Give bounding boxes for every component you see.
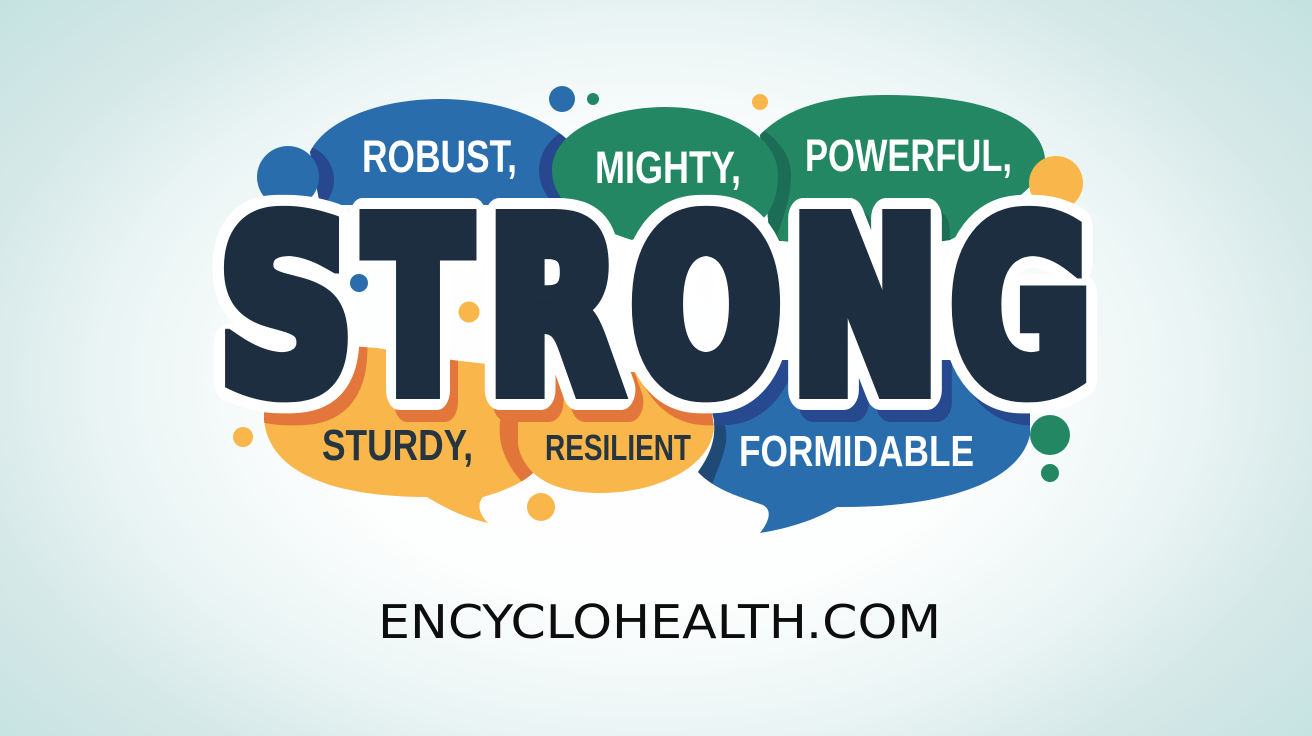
title: STRONG: G xyxy=(952,173,1090,446)
title: STRONG: O xyxy=(632,171,780,446)
letter shadow: orange: N xyxy=(800,183,946,458)
bubble: robust xyxy=(257,99,566,205)
letter shadow: blue: G xyxy=(962,185,1100,458)
word: mighty: MIGHTY, xyxy=(595,142,741,193)
website footer: ENCYCLOHEALTH.COM xyxy=(378,595,941,649)
bubble: powerful xyxy=(760,95,1045,242)
letter shadow: orange: T xyxy=(374,183,478,458)
dot: yellow in letters xyxy=(458,302,480,322)
title outline: G xyxy=(952,173,1090,446)
dot: blue in letters xyxy=(350,274,368,292)
letter shadow: blue xyxy=(712,360,1030,426)
letter shadow: orange: O xyxy=(640,183,788,458)
letter shadow: green xyxy=(776,212,950,242)
letter shadow: green: O xyxy=(640,183,788,458)
letter shadow: blue: O xyxy=(642,183,790,458)
infographic xyxy=(212,86,1097,638)
letter shadow: green: G xyxy=(960,185,1098,458)
title outline: O xyxy=(632,171,780,446)
word: formidable: FORMIDABLE xyxy=(739,427,974,476)
letter shadow: orange: S xyxy=(228,183,360,458)
bubble: formidable xyxy=(698,363,1030,533)
title: STRONG: S xyxy=(220,171,352,446)
letter shadow: blue: N xyxy=(802,183,948,458)
title: STRONG: T xyxy=(366,171,470,446)
title outline: N xyxy=(792,171,938,446)
title outline: R xyxy=(489,172,619,446)
title: STRONG: R xyxy=(489,172,619,446)
title: STRONG: N xyxy=(792,171,938,446)
letter shadow: orange: R xyxy=(497,184,627,458)
letter shadow: orange: G xyxy=(960,185,1098,458)
decorative dots xyxy=(233,86,1083,521)
bubble: resilient xyxy=(518,360,714,493)
word: robust: ROBUST, xyxy=(362,131,517,182)
title: STRONG xyxy=(220,171,1090,446)
word: sturdy: STURDY, xyxy=(322,421,473,470)
word: resilient: RESILIENT xyxy=(545,427,691,468)
letter shadow: orange on resilient: O xyxy=(640,183,788,458)
title outline: T xyxy=(366,171,470,446)
letter shadow: orange xyxy=(264,346,502,426)
bubble: mighty xyxy=(552,107,778,240)
word: powerful: POWERFUL, xyxy=(805,130,1012,181)
letter shadow: orange on resilient: R xyxy=(497,184,627,458)
bubble: sturdy xyxy=(264,346,533,523)
letter shadow: orange on resilient: T xyxy=(374,183,478,458)
title outline: S xyxy=(220,171,352,446)
title outline xyxy=(220,171,1090,446)
letter shadow: orange on resilient xyxy=(536,372,714,426)
letter shadow: green: N xyxy=(800,183,946,458)
